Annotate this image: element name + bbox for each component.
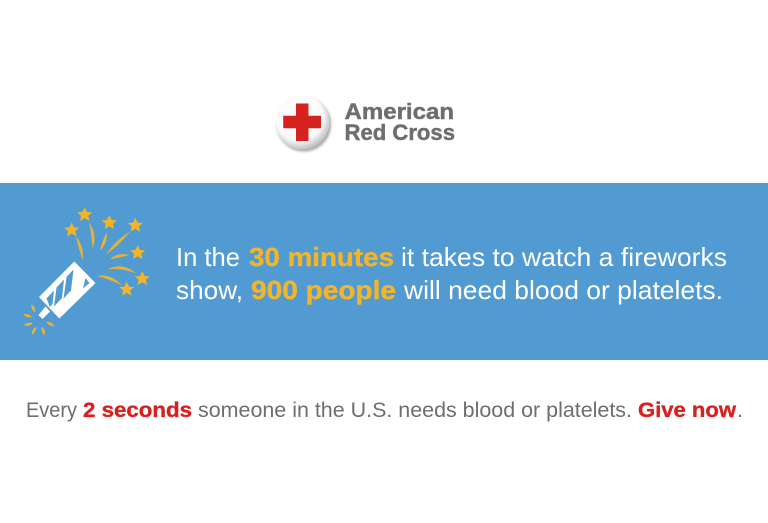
panel: blue banner	[0, 183, 768, 360]
stars	[64, 207, 150, 296]
headline text: it takes to watch a fireworks	[401, 242, 727, 272]
headline text: will need blood or platelets.	[403, 275, 723, 305]
headline text: In the	[176, 242, 240, 272]
footer call to action: .	[737, 399, 743, 422]
headline text: show,	[176, 275, 243, 305]
icon: firework rocket	[23, 207, 150, 335]
footer call to action: Give now	[638, 399, 737, 422]
logo wordmark: Red Cross	[344, 120, 455, 145]
sparks near rocket base	[23, 304, 54, 335]
rocket body	[38, 262, 96, 319]
footer call to action: Every	[26, 399, 77, 422]
footer call to action: someone in the U.S. needs blood or platelets.	[198, 399, 632, 422]
footer call to action	[26, 399, 743, 422]
streaks	[76, 223, 136, 285]
headline text: 900 people	[251, 275, 396, 305]
footer call to action: 2 seconds	[83, 399, 192, 422]
logo wordmark: American	[344, 99, 454, 124]
logo: American Red Cross	[276, 96, 455, 152]
logo wordmark	[344, 99, 455, 145]
headline text: 30 minutes	[249, 242, 394, 272]
icon: red cross button	[276, 96, 331, 152]
headline text	[176, 242, 727, 305]
